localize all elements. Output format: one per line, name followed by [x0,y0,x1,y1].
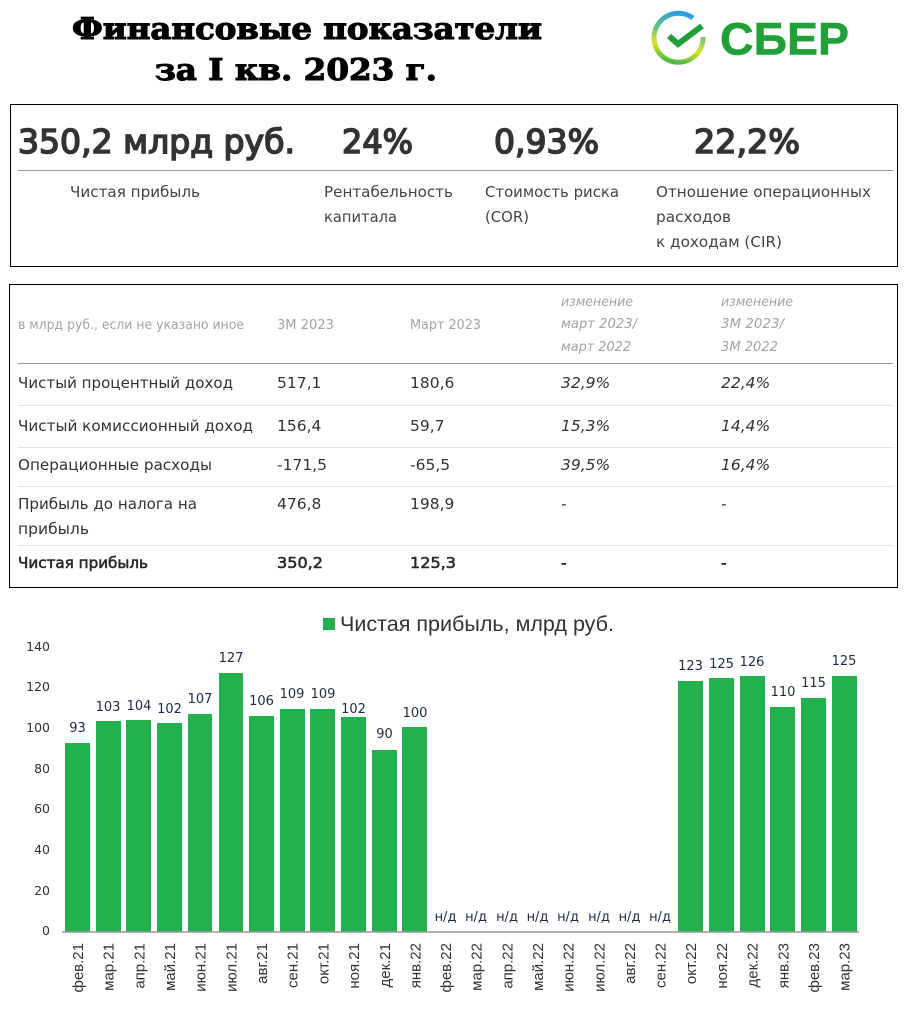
data labels: н/д [435,910,456,925]
table header: изменение [721,294,793,310]
y axis labels: 100 [26,720,50,735]
table header: 3М 2022 [721,339,778,355]
data labels: 125 [832,654,856,669]
bar chart: net profit [26,613,859,993]
x axis labels: июн.21 [192,943,210,992]
x axis labels: окт.22 [683,943,700,984]
row: net interest income: 180,6 [410,374,454,392]
x axis labels: янв.22 [408,943,424,988]
x axis labels: фев.23 [806,943,823,993]
row: net interest income: 32,9% [561,374,610,392]
metric: cost of risk: (COR) [485,208,529,226]
metric: net profit: Чистая прибыль [70,183,200,201]
x axis labels: окт.21 [316,943,332,984]
data labels: н/д [619,910,640,925]
y axis labels: 140 [26,639,50,654]
data labels: н/д [496,910,518,925]
row: pre-tax profit: - [721,495,727,513]
x axis labels: июл.21 [224,943,240,992]
x axis labels: ноя.21 [346,943,363,989]
table header: изменение [561,294,633,310]
chart legend: Чистая прибыль, млрд руб. [340,613,614,636]
icon: Sber logo: СБЕР [720,14,849,64]
x axis labels: мар.21 [100,943,118,991]
x axis labels: апр.22 [500,943,516,989]
table header: Март 2023 [410,318,481,333]
metric: net profit: 350,2 млрд руб. [18,122,295,161]
y axis labels: 60 [34,801,50,816]
row: pre-tax profit [18,495,727,538]
data labels: н/д [557,910,579,925]
row: pre-tax profit: Прибыль до налога на [18,495,197,513]
metric: CIR: 22,2% [694,122,800,161]
x axis labels: янв.23 [776,943,792,988]
metric: return on equity: капитала [324,208,397,226]
row: net fee income: 14,4% [721,417,770,435]
row: net profit: - [561,554,567,572]
x axis labels: сен.21 [284,943,302,988]
data labels: 103 [96,700,120,715]
row: net interest income: Чистый процентный доход [18,374,233,392]
row: net fee income: 59,7 [410,417,445,435]
y axis labels: 80 [34,761,50,776]
data labels: 110 [771,685,795,700]
metric: CIR [656,122,871,251]
data labels: 109 [280,687,304,702]
x axis labels: дек.22 [744,943,762,988]
x axis labels: сен.22 [652,943,670,988]
row: net interest income: 517,1 [277,374,321,392]
data labels: н/д [527,910,548,925]
metric: CIR: Отношение операционных [656,183,871,201]
table header [18,294,793,355]
data labels: 106 [249,694,274,709]
row: net profit [18,554,727,572]
data labels: 93 [69,721,86,736]
x axis labels: май.22 [530,943,547,991]
data labels: 102 [341,702,366,717]
row: operating expenses: -65,5 [410,456,450,474]
data labels: н/д [588,910,610,925]
metric: return on equity [324,122,453,226]
table header: март 2023/ [561,316,638,332]
row: pre-tax profit: прибыль [18,520,89,538]
x axis labels [70,943,854,993]
x axis labels: июл.22 [592,943,608,992]
row: net interest income [18,374,770,392]
row: operating expenses: 39,5% [561,456,610,474]
y axis labels: 0 [42,923,50,938]
data labels: 100 [403,706,427,721]
row: pre-tax profit: - [561,495,567,513]
x axis labels: май.21 [162,943,179,991]
x axis labels: дек.21 [377,943,394,988]
row: net fee income: 15,3% [561,417,610,435]
data labels: 126 [740,655,764,670]
metric: return on equity: 24% [342,122,413,161]
row: operating expenses: Операционные расходы [18,456,212,474]
data labels: 104 [127,699,151,714]
bars [65,673,857,932]
row: pre-tax profit: 476,8 [277,495,321,513]
metric: CIR: расходов [656,208,731,226]
title: Финансовые показатели [72,12,542,47]
row: net fee income: Чистый комиссионный доход [18,417,253,435]
y axis labels: 40 [34,842,50,857]
panel: key metrics [10,104,898,266]
metric: net profit [18,122,295,201]
data labels: 90 [376,727,393,742]
table header: 3М 2023/ [721,316,785,332]
metric: cost of risk: Стоимость риска [485,183,619,201]
data labels: 115 [801,676,826,691]
y axis labels: 20 [34,883,50,898]
row: net profit: Чистая прибыль [18,554,148,572]
row: operating expenses: -171,5 [277,456,327,474]
x axis labels: авг.22 [622,943,639,984]
x axis labels: мар.23 [836,943,854,991]
table header: 3М 2023 [277,318,334,333]
table header: в млрд руб., если не указано иное [18,318,244,333]
metric: cost of risk [485,122,619,226]
data labels: 102 [157,702,182,717]
data labels: 127 [219,651,243,666]
x axis labels: июн.22 [560,943,578,992]
row: net fee income: 156,4 [277,417,321,435]
data labels [69,651,856,925]
data labels: н/д [649,910,671,925]
x axis labels: мар.22 [468,943,486,991]
row: net fee income [18,417,770,435]
row: operating expenses: 16,4% [721,456,770,474]
x axis labels: апр.21 [132,943,148,989]
x axis labels: ноя.22 [714,943,731,989]
metric: CIR: к доходам (CIR) [656,233,782,251]
y axis labels [26,639,50,938]
title: за I кв. 2023 г. [155,53,437,88]
y axis labels: 120 [26,679,50,694]
data labels: 125 [709,657,734,672]
metric: cost of risk: 0,93% [494,122,599,161]
metric: return on equity: Рентабельность [324,183,453,201]
data labels: 123 [678,659,703,674]
data labels: н/д [465,910,487,925]
x axis labels: фев.22 [438,943,455,993]
row: net profit: 125,3 [410,554,456,572]
row: operating expenses [18,456,770,474]
row: net interest income: 22,4% [721,374,770,392]
panel: financial table [10,284,898,588]
table header: март 2022 [561,339,631,355]
row: net profit: 350,2 [277,554,323,572]
x axis labels: фев.21 [70,943,87,993]
title [72,12,542,88]
icon: Sber logo [654,13,849,65]
row: net profit: - [721,554,727,572]
x axis labels: авг.21 [254,943,271,984]
row: pre-tax profit: 198,9 [410,495,454,513]
data labels: 109 [311,687,335,702]
data labels: 107 [188,692,212,707]
